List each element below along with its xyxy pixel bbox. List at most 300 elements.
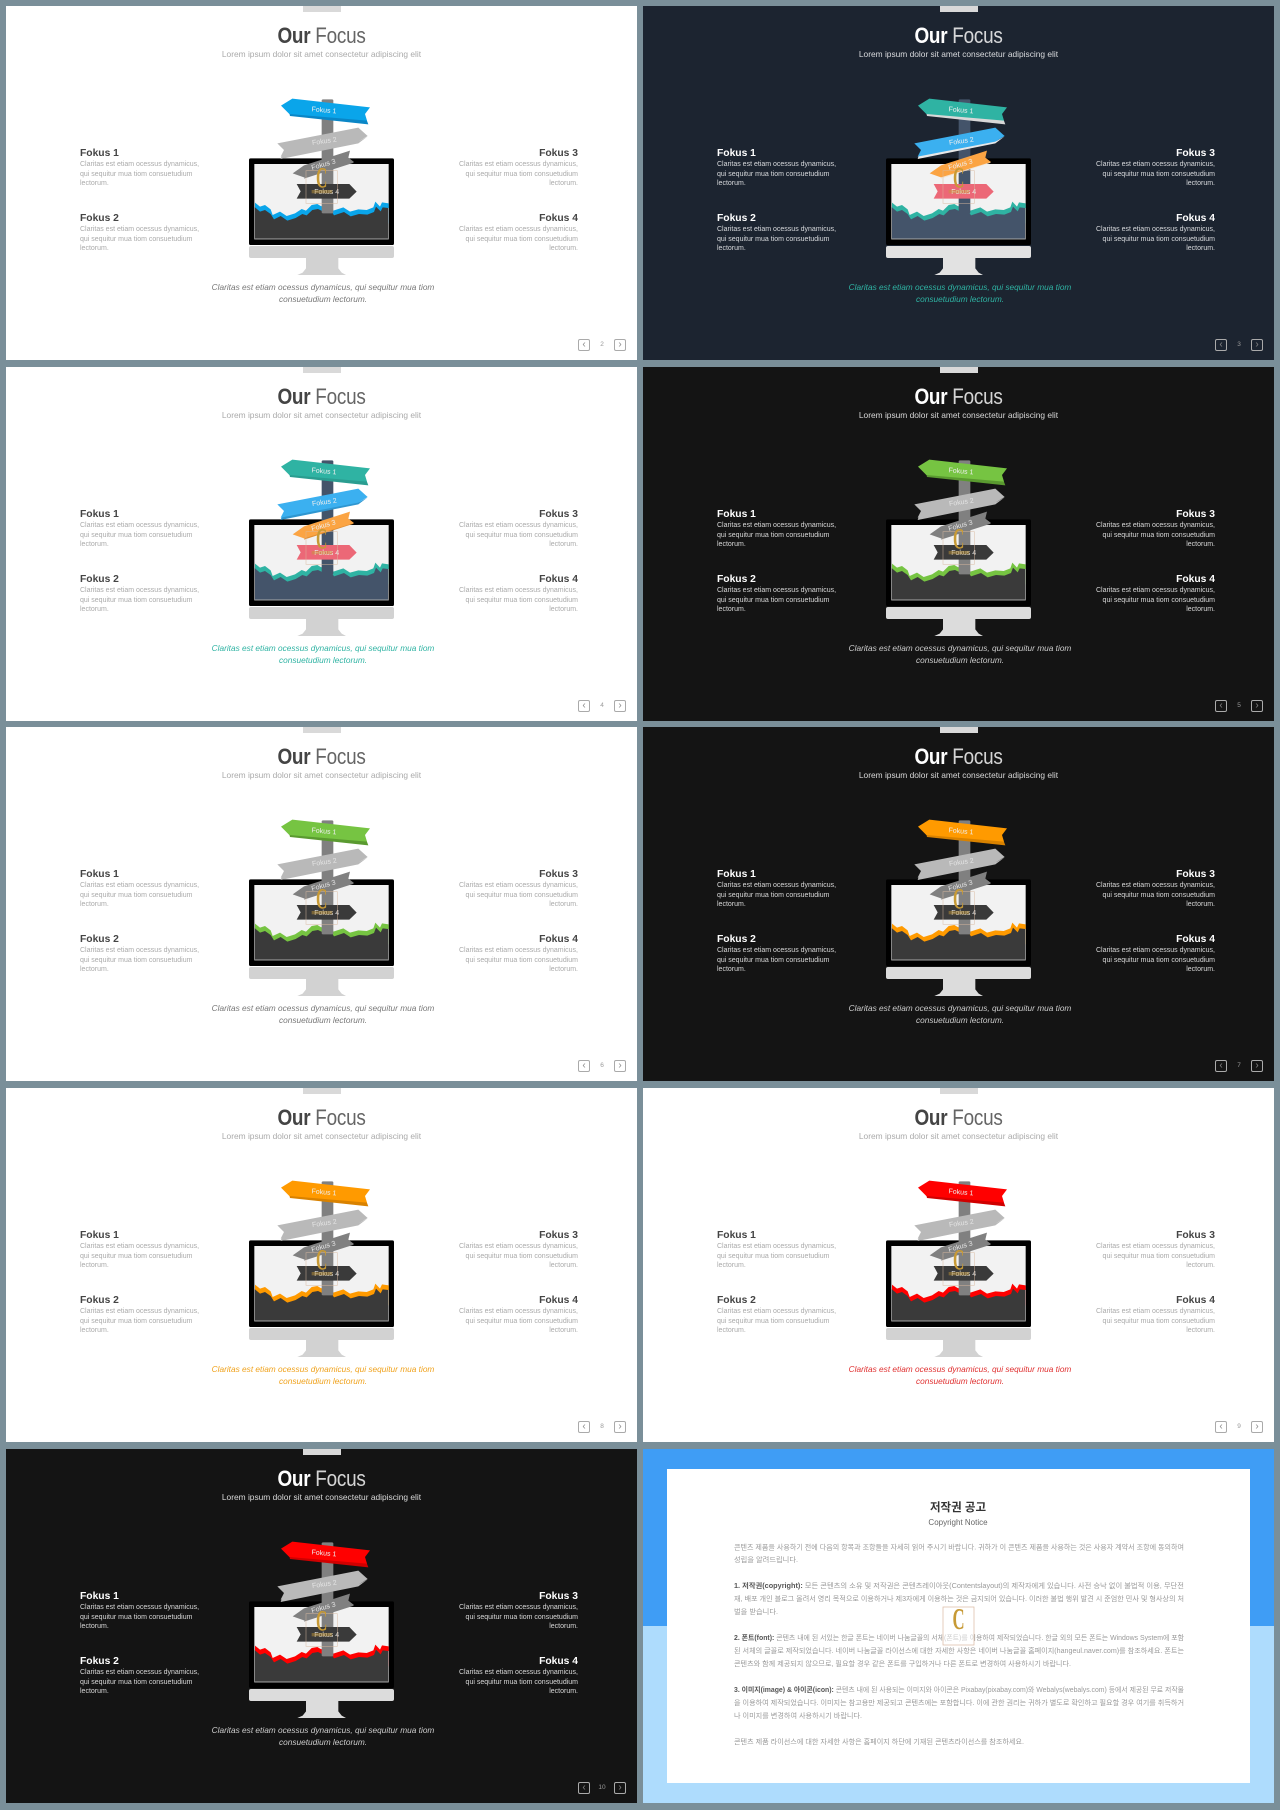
text block: Fokus 4: Claritas est etiam ocessus dynamicus, <box>459 1308 578 1315</box>
text block: Fokus 1: qui sequitur mua tiom consuetudium <box>80 1252 192 1260</box>
nav: next: › <box>618 339 622 350</box>
text block: Fokus 2 <box>80 934 199 973</box>
text block: Fokus 3 <box>459 869 578 908</box>
text block: Fokus 1: Claritas est etiam ocessus dynamicus, <box>80 522 199 529</box>
caption: consuetudium lectorum. <box>279 294 367 304</box>
nav: previous: ‹ <box>1219 339 1223 350</box>
sign 3: Fokus 3 <box>948 519 974 533</box>
text block: Fokus 2: Claritas est etiam ocessus dynamicus, <box>717 947 836 954</box>
text block: Fokus 1: qui sequitur mua tiom consuetudium <box>80 892 192 898</box>
caption <box>760 1363 1160 1387</box>
watermark: C <box>953 524 964 556</box>
watermark: C <box>953 884 964 916</box>
page number: 9 <box>1237 1423 1241 1430</box>
text block: Fokus 2 <box>717 213 836 252</box>
text block: Fokus 2: Claritas est etiam ocessus dynamicus, <box>80 1308 199 1315</box>
text block: Fokus 4: lectorum. <box>1186 1327 1215 1334</box>
caption: consuetudium lectorum. <box>916 655 1004 665</box>
text block: Fokus 4: Claritas est etiam ocessus dynamicus, <box>1096 947 1215 954</box>
sign 1 <box>281 1181 370 1206</box>
text block: Fokus 1 <box>80 1229 205 1277</box>
text block: Fokus 4: lectorum. <box>549 1688 578 1695</box>
sign 4 <box>934 905 994 920</box>
watermark <box>306 524 337 564</box>
subtitle: Lorem ipsum dolor sit amet consectetur adipiscing elit <box>222 1131 421 1141</box>
text block: Fokus 3: qui sequitur mua tiom consuetudium <box>466 1252 578 1260</box>
illustration: monitor with signpost <box>886 460 1031 636</box>
text block: Fokus 2: qui sequitur mua tiom consuetudium <box>80 236 192 242</box>
sign 2 <box>914 1210 1005 1241</box>
nav: next <box>1251 1421 1263 1433</box>
nav: previous <box>578 700 590 712</box>
watermark <box>943 884 974 924</box>
watermark: C <box>952 1603 965 1636</box>
text block: Fokus 1: Fokus 1 <box>80 509 119 520</box>
text block: Fokus 2: lectorum. <box>717 606 746 613</box>
illustration: monitor with signpost <box>867 1172 1047 1372</box>
text block: Fokus 2: lectorum. <box>80 606 109 613</box>
watermark <box>306 884 337 924</box>
sign 3 <box>930 1233 991 1261</box>
caption <box>849 282 1071 304</box>
text block: Fokus 4: Claritas est etiam ocessus dynamicus, <box>1096 226 1215 233</box>
text block: Fokus 1: lectorum. <box>80 541 109 548</box>
panel: slide 8 white orange <box>6 1088 637 1442</box>
text block: Fokus 2: Fokus 2 <box>717 934 756 945</box>
text block: Fokus 3: Fokus 3 <box>539 509 578 520</box>
text block: Fokus 2: lectorum. <box>717 1327 746 1334</box>
sign 4 <box>934 1266 994 1281</box>
text block: Fokus 3: qui sequitur mua tiom consuetudium <box>1103 170 1215 178</box>
text block: Fokus 2 <box>80 1294 205 1342</box>
text block: Fokus 3: Claritas est etiam ocessus dynamicus, <box>459 161 578 168</box>
copyright body text <box>734 1542 1185 1746</box>
nav: previous <box>578 1421 590 1433</box>
text block: Fokus 1: lectorum. <box>80 1623 109 1630</box>
text block: Fokus 1: Claritas est etiam ocessus dynamicus, <box>717 882 836 889</box>
watermark <box>943 163 974 203</box>
text block: Fokus 4: qui sequitur mua tiom consuetudium <box>466 956 578 964</box>
text block: Fokus 3: Claritas est etiam ocessus dynamicus, <box>1096 522 1215 529</box>
text block: Fokus 1: Claritas est etiam ocessus dynamicus, <box>80 1243 199 1250</box>
sign 2 <box>914 849 1005 880</box>
panel: slide 10 black red <box>6 1449 637 1803</box>
text block: Fokus 3: qui sequitur mua tiom consuetudium <box>466 532 578 538</box>
text block: Fokus 3: Fokus 3 <box>1176 509 1215 520</box>
sign 4: Fokus 4 <box>314 550 339 557</box>
watermark <box>306 1245 337 1285</box>
sign 4: Fokus 4 <box>951 189 976 196</box>
text block: Fokus 2: Fokus 2 <box>80 1295 119 1306</box>
nav: next: › <box>1255 339 1259 350</box>
text block: Fokus 4: Fokus 4 <box>539 934 578 945</box>
text block: Fokus 1: lectorum. <box>80 1262 109 1269</box>
sign 1 <box>918 99 1007 124</box>
panel: slide 5 black green <box>643 367 1274 721</box>
nav: previous <box>578 1782 590 1794</box>
panel: slide 6 white green <box>6 727 637 1081</box>
text block: Fokus 2: Claritas est etiam ocessus dynamicus, <box>717 587 836 594</box>
text block: Fokus 2: Claritas est etiam ocessus dynamicus, <box>717 226 836 233</box>
text block: Fokus 4: lectorum. <box>549 245 578 252</box>
sign 3 <box>293 151 354 179</box>
nav: previous: ‹ <box>582 339 586 350</box>
text block: Fokus 3: Claritas est etiam ocessus dynamicus, <box>1096 882 1215 889</box>
page number: 10 <box>598 1784 606 1791</box>
text block: Fokus 2: qui sequitur mua tiom consuetudium <box>717 596 829 604</box>
copyright body text: 된 서체의 글꼴로 제작되었습니다. 네이버 나눔글꼴 라이선스에 대한 자세한 사항은 네이버 나눔글꼴 홈페이지(hangeul.naver.com)를 참조하세요. 폰트는 <box>734 1646 1185 1655</box>
text block: Fokus 2: Fokus 2 <box>80 1656 119 1667</box>
caption: consuetudium lectorum. <box>916 1376 1004 1386</box>
text block: Fokus 2 <box>717 934 836 973</box>
sign 2: Fokus 2 <box>312 137 337 147</box>
nav: next: › <box>618 700 622 711</box>
text block: Fokus 2 <box>80 1655 205 1703</box>
text block: Fokus 1 <box>717 148 836 187</box>
text block: Fokus 1: Fokus 1 <box>717 1230 756 1241</box>
sign 3: Fokus 3 <box>948 1240 974 1254</box>
copyright body text: 3. 이미지(image) & 아이콘(icon): 콘텐츠 내에 된 사용되는 이미지와 아이콘은 Pixabay(pixabay.com)와 Webalys(webalys.com) 등에서 제공된 무료 저작물 <box>734 1685 1185 1694</box>
text block: Fokus 2: qui sequitur mua tiom consuetudium <box>717 956 829 964</box>
sign 2 <box>277 1571 368 1602</box>
text block: Fokus 4 <box>453 1294 578 1342</box>
text block: Fokus 1: Fokus 1 <box>717 869 756 880</box>
text block: Fokus 2: Claritas est etiam ocessus dynamicus, <box>80 1669 199 1676</box>
caption: consuetudium lectorum. <box>279 1376 367 1386</box>
sign 1: Fokus 1 <box>948 827 974 836</box>
panel: slide 9 white red <box>643 1088 1274 1442</box>
copyright body text: 을 이용하여 제작되었습니다. 이미지는 참고용만 제공되고 콘텐츠에는 포함합니다. 이에 관한 권리는 귀하가 별도로 확인하고 필요할 경우 여기를 취득하거 <box>734 1698 1184 1707</box>
sign 2: Fokus 2 <box>312 1580 337 1590</box>
text block: Fokus 3: Fokus 3 <box>539 148 578 159</box>
text block: Fokus 1: lectorum. <box>717 541 746 548</box>
sign 1 <box>918 820 1007 845</box>
illustration: monitor with signpost <box>886 98 1031 275</box>
nav: next: › <box>618 1782 622 1793</box>
sign 2 <box>277 128 368 159</box>
text block: Fokus 2: lectorum. <box>80 1327 109 1334</box>
page number: 5 <box>1237 702 1241 709</box>
page number: 2 <box>600 341 604 348</box>
text block: Fokus 4 <box>1096 213 1215 252</box>
text block: Fokus 4: lectorum. <box>1186 245 1215 252</box>
sign 3: Fokus 3 <box>948 879 974 893</box>
page number: 8 <box>600 1423 604 1430</box>
nav: previous: ‹ <box>582 700 586 711</box>
text block: Fokus 2: lectorum. <box>717 966 746 973</box>
text block: Fokus 4 <box>459 934 578 973</box>
page number: 7 <box>1237 1062 1241 1069</box>
watermark: C <box>316 1606 327 1638</box>
text block: Fokus 3: lectorum. <box>1186 541 1215 548</box>
watermark: C <box>953 1245 964 1277</box>
text block: Fokus 4: qui sequitur mua tiom consuetudium <box>466 1318 578 1324</box>
page number: 3 <box>1237 341 1241 348</box>
text block: Fokus 1: Fokus 1 <box>717 148 756 159</box>
text block: Fokus 4: lectorum. <box>549 606 578 613</box>
sign 4 <box>934 545 994 560</box>
text block: Fokus 1: qui sequitur mua tiom consuetudium <box>717 892 829 898</box>
copyright body text: 1. 저작권(copyright): 모든 콘텐츠의 소유 및 저작권은 콘텐츠레이아웃(Contentslayout)의 제작자에게 있습니다. 사전 승낙 없이 불법적 이용, 무단전 <box>734 1581 1184 1590</box>
text block: Fokus 4: Fokus 4 <box>539 1656 578 1667</box>
text block: Fokus 1: Fokus 1 <box>80 869 119 880</box>
caption: Claritas est etiam ocessus dynamicus, qui sequitur mua tiom <box>212 643 434 653</box>
text block: Fokus 3: qui sequitur mua tiom consuetudium <box>1103 1252 1215 1260</box>
title: Our Focus <box>914 23 1003 48</box>
subtitle: Lorem ipsum dolor sit amet consectetur adipiscing elit <box>859 1131 1058 1141</box>
text block: Fokus 2: lectorum. <box>80 966 109 973</box>
title: Our Focus <box>277 384 366 409</box>
copyright subheading: Copyright Notice <box>928 1518 988 1527</box>
text block: Fokus 1: Claritas est etiam ocessus dynamicus, <box>717 522 836 529</box>
watermark <box>943 1603 974 1645</box>
text block: Fokus 2: Claritas est etiam ocessus dynamicus, <box>80 226 199 233</box>
nav: next <box>614 1421 626 1433</box>
caption: Claritas est etiam ocessus dynamicus, qui sequitur mua tiom <box>212 1725 434 1735</box>
watermark <box>943 1245 974 1285</box>
page number: 6 <box>600 1062 604 1069</box>
sign 4 <box>297 184 357 199</box>
sign 3: Fokus 3 <box>311 158 337 172</box>
nav: previous <box>1215 1060 1227 1072</box>
nav: previous: ‹ <box>582 1782 586 1793</box>
subtitle: Lorem ipsum dolor sit amet consectetur adipiscing elit <box>222 770 421 780</box>
text block: Fokus 1: qui sequitur mua tiom consuetudium <box>80 170 192 178</box>
sign 3 <box>293 1594 354 1622</box>
sign 4: Fokus 4 <box>951 1271 976 1278</box>
sign 3 <box>930 512 991 540</box>
sign 3: Fokus 3 <box>311 879 337 893</box>
text block: Fokus 3: lectorum. <box>549 1623 578 1630</box>
caption <box>849 643 1071 665</box>
sign 4 <box>297 545 357 560</box>
caption: consuetudium lectorum. <box>916 294 1004 304</box>
watermark: C <box>953 163 964 195</box>
sign 1: Fokus 1 <box>311 1188 337 1197</box>
text block: Fokus 1: lectorum. <box>717 1262 746 1269</box>
nav: next <box>614 1782 626 1794</box>
text block: Fokus 4: Fokus 4 <box>539 574 578 585</box>
sign 3: Fokus 3 <box>311 1601 337 1615</box>
title: Our Focus <box>277 1466 366 1491</box>
text block: Fokus 2: Claritas est etiam ocessus dynamicus, <box>80 947 199 954</box>
caption: consuetudium lectorum. <box>279 655 367 665</box>
text block: Fokus 4: Claritas est etiam ocessus dynamicus, <box>459 587 578 594</box>
text block: Fokus 2: lectorum. <box>80 245 109 252</box>
text block: Fokus 2 <box>80 213 199 252</box>
text block: Fokus 4: Claritas est etiam ocessus dynamicus, <box>459 1669 578 1676</box>
title: Our Focus <box>914 744 1003 769</box>
text block: Fokus 3: Fokus 3 <box>539 1591 578 1602</box>
text block: Fokus 3: Claritas est etiam ocessus dynamicus, <box>1096 1243 1215 1250</box>
title: Our Focus <box>277 1105 366 1130</box>
subtitle: Lorem ipsum dolor sit amet consectetur adipiscing elit <box>859 49 1058 59</box>
text block: Fokus 1: Fokus 1 <box>80 148 119 159</box>
title: Our Focus <box>914 384 1003 409</box>
caption: consuetudium lectorum. <box>279 1737 367 1747</box>
text block: Fokus 3: Fokus 3 <box>539 1230 578 1241</box>
sign 1 <box>281 1542 370 1567</box>
sign 3: Fokus 3 <box>311 1240 337 1254</box>
text block: Fokus 1 <box>80 869 199 908</box>
sign 3: Fokus 3 <box>948 158 974 172</box>
nav: next <box>614 339 626 351</box>
nav: previous: ‹ <box>582 1060 586 1071</box>
text block: Fokus 1 <box>80 1590 205 1638</box>
text block: Fokus 2 <box>717 1294 842 1342</box>
text block: Fokus 2: Fokus 2 <box>717 574 756 585</box>
caption: Claritas est etiam ocessus dynamicus, qui sequitur mua tiom <box>849 1003 1071 1013</box>
sign 4: Fokus 4 <box>951 550 976 557</box>
caption <box>760 1002 1160 1026</box>
copyright heading: 저작권 공고 <box>930 1500 986 1514</box>
sign 4: Fokus 4 <box>314 189 339 196</box>
caption: Claritas est etiam ocessus dynamicus, qui sequitur mua tiom <box>849 643 1071 653</box>
text block: Fokus 1: lectorum. <box>80 901 109 908</box>
sign 1 <box>281 820 370 845</box>
panel: slide 2 white blue <box>6 6 637 360</box>
nav: previous <box>1215 700 1227 712</box>
text block: Fokus 1: Claritas est etiam ocessus dynamicus, <box>717 161 836 168</box>
copyright body text: 재, 배포 개인 블로그 올려서 영리 목적으로 이용하거나 제3자에게 이용하는 것은 금지되어 있습니다. 이러한 불법 행위 발견 시 준엄한 민사 및 형사상의 처 <box>734 1594 1184 1603</box>
sign 3 <box>930 151 991 179</box>
nav: previous <box>1215 339 1227 351</box>
sign 3 <box>293 1233 354 1261</box>
text block: Fokus 3: qui sequitur mua tiom consuetudium <box>1103 892 1215 898</box>
sign 2 <box>277 489 368 520</box>
page number: 4 <box>600 702 604 709</box>
text block: Fokus 3: lectorum. <box>549 180 578 187</box>
text block: Fokus 4 <box>459 574 578 613</box>
text block: Fokus 2 <box>80 574 199 613</box>
text block: Fokus 1 <box>717 1229 842 1277</box>
text block: Fokus 4: qui sequitur mua tiom consuetudium <box>466 236 578 242</box>
sign 2: Fokus 2 <box>949 858 974 868</box>
text block: Fokus 1: qui sequitur mua tiom consuetudium <box>80 1614 192 1620</box>
text block: Fokus 4: Fokus 4 <box>539 213 578 224</box>
nav: previous <box>1215 1421 1227 1433</box>
text block: Fokus 2: Fokus 2 <box>80 934 119 945</box>
text block: Fokus 2: qui sequitur mua tiom consuetudium <box>80 1678 192 1686</box>
subtitle: Lorem ipsum dolor sit amet consectetur adipiscing elit <box>222 410 421 420</box>
text block: Fokus 4: qui sequitur mua tiom consuetudium <box>466 596 578 604</box>
sign 4: Fokus 4 <box>951 910 976 917</box>
sign 1: Fokus 1 <box>311 827 337 836</box>
text block: Fokus 2: lectorum. <box>80 1688 109 1695</box>
sign 3: Fokus 3 <box>311 519 337 533</box>
text block: Fokus 1: Claritas est etiam ocessus dynamicus, <box>80 161 199 168</box>
watermark: C <box>316 163 327 195</box>
text block: Fokus 4: Fokus 4 <box>1176 213 1215 224</box>
sign 1 <box>281 99 370 124</box>
text block: Fokus 3 <box>1096 509 1215 548</box>
text block: Fokus 1 <box>717 509 836 548</box>
sign 2 <box>914 128 1005 159</box>
illustration: monitor with signpost <box>230 1533 410 1733</box>
sign 4 <box>934 184 994 199</box>
sign 1 <box>281 460 370 485</box>
sign 2: Fokus 2 <box>312 1219 337 1229</box>
watermark: C <box>316 524 327 556</box>
sign 4: Fokus 4 <box>314 910 339 917</box>
subtitle: Lorem ipsum dolor sit amet consectetur adipiscing elit <box>859 410 1058 420</box>
text block: Fokus 3: lectorum. <box>1186 901 1215 908</box>
text block: Fokus 2: Claritas est etiam ocessus dynamicus, <box>717 1308 836 1315</box>
text block: Fokus 2: Fokus 2 <box>717 213 756 224</box>
title: Our Focus <box>914 1105 1003 1130</box>
sign 1: Fokus 1 <box>948 1188 974 1197</box>
text block: Fokus 3: Fokus 3 <box>1176 1230 1215 1241</box>
text block: Fokus 4 <box>1096 934 1215 973</box>
nav: previous <box>578 1060 590 1072</box>
text block: Fokus 2: Fokus 2 <box>80 574 119 585</box>
text block: Fokus 4: qui sequitur mua tiom consuetudium <box>1103 236 1215 242</box>
text block: Fokus 4 <box>1096 574 1215 613</box>
illustration: monitor with signpost <box>230 1172 410 1372</box>
text block: Fokus 2: Claritas est etiam ocessus dynamicus, <box>80 587 199 594</box>
text block: Fokus 3: Fokus 3 <box>1176 148 1215 159</box>
text block: Fokus 3 <box>459 148 578 187</box>
sign 2: Fokus 2 <box>312 858 337 868</box>
text block: Fokus 3: Fokus 3 <box>539 869 578 880</box>
text block: Fokus 3: qui sequitur mua tiom consuetudium <box>1103 532 1215 538</box>
text block: Fokus 4: Fokus 4 <box>1176 574 1215 585</box>
copyright body text: 콘텐츠와 함께 제공되지 않으므로, 필요할 경우 같은 폰트를 구입하거나 다른 폰트로 변경하여 사용하시기 바랍니다. <box>734 1659 1071 1668</box>
text block: Fokus 3: lectorum. <box>1186 180 1215 187</box>
copyright body text: 성립을 알려드립니다. <box>734 1555 798 1564</box>
sign 1: Fokus 1 <box>311 467 337 476</box>
text block: Fokus 4: Fokus 4 <box>1176 934 1215 945</box>
caption: Claritas est etiam ocessus dynamicus, qui sequitur mua tiom <box>212 1364 434 1374</box>
nav: previous: ‹ <box>582 1421 586 1432</box>
sign 1: Fokus 1 <box>948 106 974 115</box>
text block: Fokus 3 <box>453 1590 578 1638</box>
sign 1: Fokus 1 <box>311 106 337 115</box>
nav: next: › <box>618 1060 622 1071</box>
caption: Claritas est etiam ocessus dynamicus, qui sequitur mua tiom <box>212 282 434 292</box>
text block: Fokus 4: lectorum. <box>1186 606 1215 613</box>
caption <box>212 643 434 665</box>
nav: next <box>1251 700 1263 712</box>
text block: Fokus 3 <box>1096 869 1215 908</box>
illustration: monitor with signpost <box>249 460 394 636</box>
text block: Fokus 2: Fokus 2 <box>80 213 119 224</box>
text block: Fokus 2: qui sequitur mua tiom consuetudium <box>80 596 192 604</box>
sign 2: Fokus 2 <box>949 498 974 508</box>
text block: Fokus 1: Claritas est etiam ocessus dynamicus, <box>80 1604 199 1611</box>
text block: Fokus 3 <box>453 1229 578 1277</box>
text block: Fokus 4 <box>459 213 578 252</box>
caption: consuetudium lectorum. <box>279 1015 367 1025</box>
text block: Fokus 3: lectorum. <box>1186 1262 1215 1269</box>
text block: Fokus 3: qui sequitur mua tiom consuetudium <box>466 170 578 178</box>
text block: Fokus 1: Claritas est etiam ocessus dynamicus, <box>80 882 199 889</box>
panel: slide 4 white multicolour <box>6 367 637 721</box>
subtitle: Lorem ipsum dolor sit amet consectetur adipiscing elit <box>222 1492 421 1502</box>
text block: Fokus 4 <box>453 1655 578 1703</box>
nav: next: › <box>1255 1421 1259 1432</box>
sign 2 <box>277 849 368 880</box>
sign 4: Fokus 4 <box>314 1632 339 1639</box>
text block: Fokus 2: lectorum. <box>717 245 746 252</box>
panel: copyright notice <box>643 1449 1274 1803</box>
caption: Claritas est etiam ocessus dynamicus, qui sequitur mua tiom <box>849 282 1071 292</box>
text block: Fokus 4: Fokus 4 <box>539 1295 578 1306</box>
text block: Fokus 2: qui sequitur mua tiom consuetudium <box>717 1318 829 1324</box>
text block: Fokus 3: lectorum. <box>549 901 578 908</box>
sign 2: Fokus 2 <box>949 137 974 147</box>
text block: Fokus 4 <box>1090 1294 1215 1342</box>
